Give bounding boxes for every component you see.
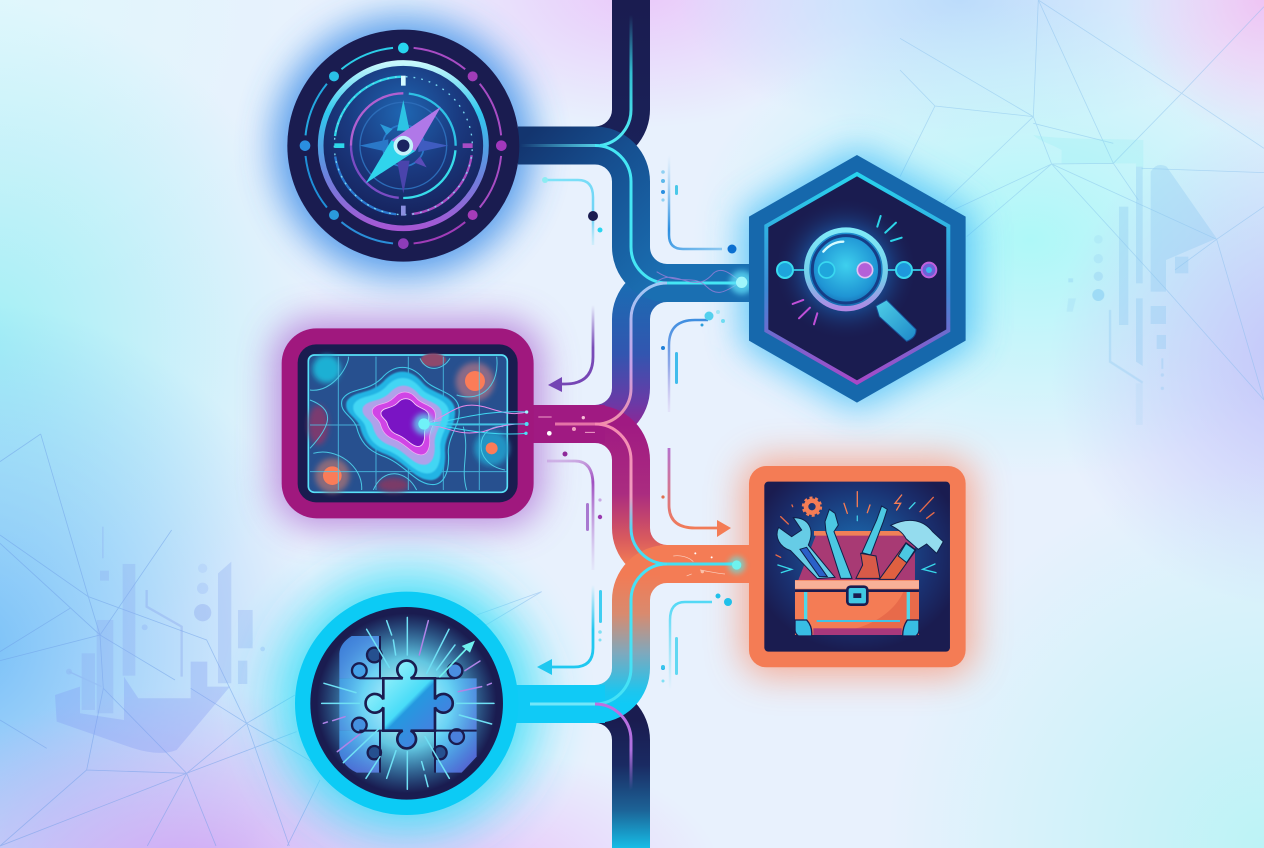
gear spark [803, 498, 821, 516]
pipe: compass to hexagon segment [518, 146, 750, 283]
glow node: hexagon junction [657, 270, 754, 294]
icon: compass badge [265, 7, 542, 284]
hexagon inner glow [774, 198, 918, 341]
chest body [795, 580, 919, 636]
strand: map to toolbox [595, 424, 735, 564]
connector: magenta elbow below map [547, 452, 602, 570]
compass star [359, 100, 448, 193]
heatmap frame [282, 328, 534, 518]
heatmap screen [308, 355, 507, 492]
icon: hexagon magnifier badge [749, 155, 966, 403]
pipe: map to toolbox segment [533, 424, 750, 564]
wrench [777, 518, 835, 579]
strand: compass to hexagon [595, 146, 742, 283]
pipe: cyan horizontal at puzzle [515, 685, 605, 723]
heat source point [413, 413, 435, 435]
hexagon frame [749, 155, 966, 403]
magnifier handle [876, 300, 916, 341]
magnifier lens [807, 230, 885, 309]
compass body [287, 30, 519, 262]
node chain [777, 262, 936, 278]
toolbox panel [764, 482, 950, 652]
puzzle centre glow [317, 613, 497, 793]
heatmap inner bezel [298, 344, 518, 502]
background: faint tech blocks lower left [55, 527, 265, 753]
screwdriver right [856, 506, 887, 578]
connector: cyan elbow below toolbox [661, 594, 732, 690]
arrow: purple into map [548, 305, 593, 392]
central heat blob [342, 367, 459, 485]
heatmap grid and contours [310, 357, 507, 490]
data sparks [524, 410, 595, 436]
icon: puzzle badge [295, 592, 518, 815]
arrow: cyan into puzzle [537, 585, 665, 682]
background: fan lines near puzzle badge [477, 592, 542, 627]
puzzle side pieces [339, 636, 477, 773]
pipe: navy top entry [518, 0, 631, 146]
chest latch [847, 587, 867, 605]
puzzle side knobs [352, 648, 464, 759]
strand: puzzle tail [530, 702, 595, 706]
background: faint tech blocks upper right [1033, 135, 1217, 425]
strand: toolbox to puzzle [595, 564, 667, 704]
compass outer arcs [265, 7, 542, 284]
pipe: inner light strands [520, 15, 742, 800]
energy sparks [776, 492, 936, 573]
icon: toolbox badge [673, 466, 966, 667]
compass dial [321, 63, 486, 228]
strand: into map [555, 422, 600, 426]
background: faint network lines upper right [900, 0, 1264, 400]
pipe: main flowing conduit [515, 0, 750, 848]
background: faint network lines lower left [0, 434, 320, 846]
puzzle joint lines [359, 636, 477, 773]
connector: blue elbow below hexagon [661, 310, 725, 412]
compass cardinal ticks [334, 76, 473, 216]
connector: light cyan elbow with navy dot [542, 177, 602, 245]
heat spots [308, 353, 509, 493]
pipe: toolbox to puzzle segment [515, 564, 750, 704]
hammer [879, 520, 943, 579]
lens sparks [793, 216, 902, 324]
screwdriver left [825, 509, 852, 578]
compass needle [366, 107, 441, 183]
growth arrow [439, 641, 475, 677]
puzzle centre piece [366, 661, 453, 748]
pipe: hexagon to map segment [533, 283, 750, 424]
puzzle ring [295, 592, 518, 815]
burst rays [322, 617, 494, 789]
puzzle disc [310, 607, 503, 800]
compass tick ring [325, 68, 481, 224]
strand: into compass [520, 144, 595, 147]
pipe: map horizontal magenta [533, 405, 605, 443]
strand: top navy [600, 15, 631, 146]
icon: heatmap badge [282, 328, 595, 518]
pipe: navy bottom exit [515, 704, 631, 848]
arrow: orange into toolbox [661, 448, 731, 537]
strand: hexagon to map [600, 283, 667, 424]
toolbox frame [749, 466, 966, 667]
glows behind the badges [273, 17, 974, 831]
chest lid interior [798, 532, 915, 580]
strand: bottom purple [595, 704, 631, 800]
pipe: toolbox horizontal orange [660, 545, 750, 583]
compass outer dots [300, 43, 507, 249]
hexagon panel [766, 174, 948, 383]
toolbox pipe spark [673, 552, 745, 576]
connector: blue elbow to hexagon [661, 155, 736, 254]
pipe: blue horizontal at hexagon [665, 264, 750, 302]
signal traces [424, 405, 527, 434]
